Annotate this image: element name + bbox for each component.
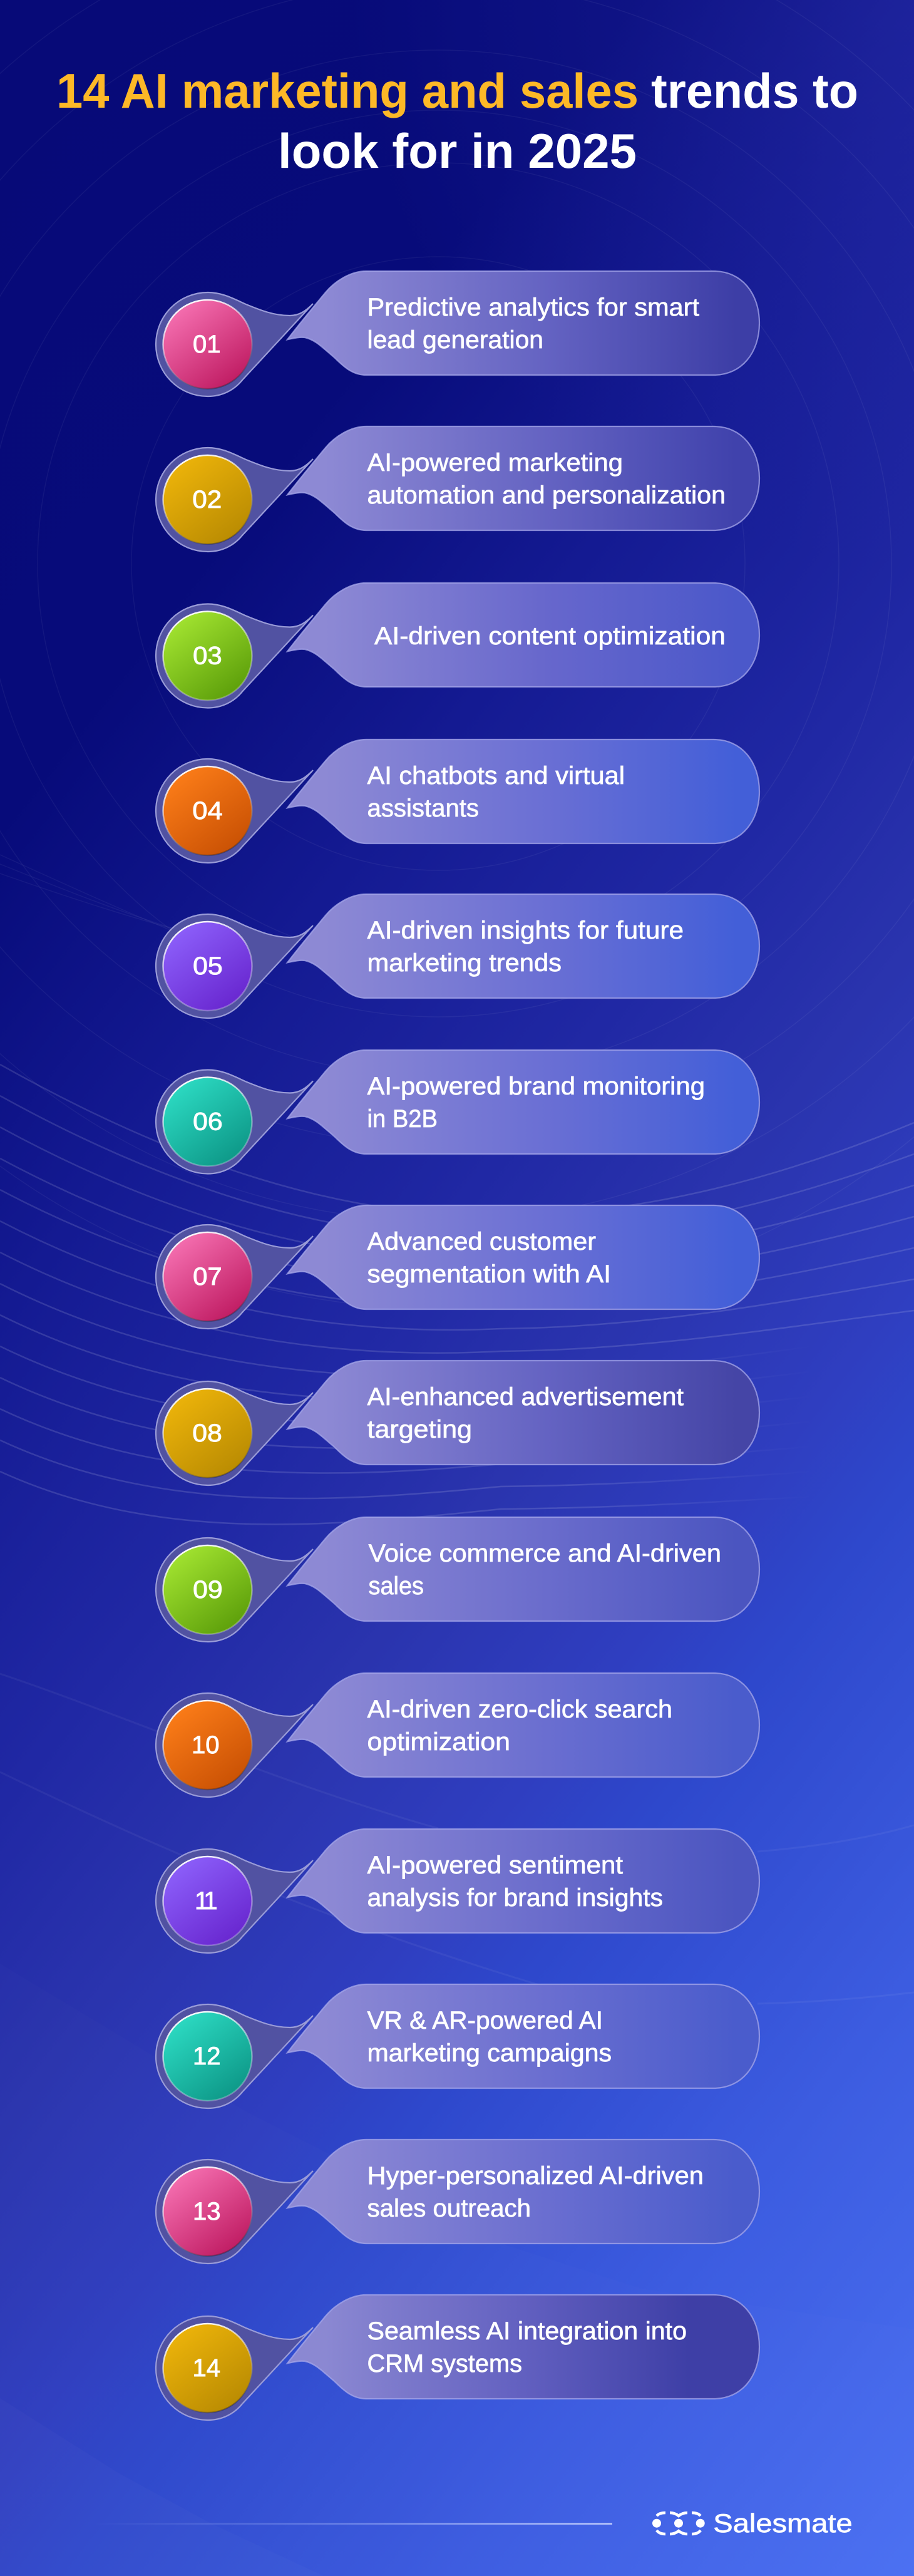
badge 13: 13 <box>193 2198 220 2225</box>
bubble 11 <box>287 1829 759 1933</box>
bubble 09: Voice commerce and AI-driven <box>368 1540 721 1567</box>
badge 05: 05 <box>193 952 223 980</box>
item 05 <box>156 894 759 1018</box>
item 02 <box>156 426 759 552</box>
item 11 <box>156 1829 759 1953</box>
bubble 02: AI-powered marketing <box>367 449 623 477</box>
bubble 11: analysis for brand insights <box>367 1884 663 1912</box>
bubble 05: marketing trends <box>367 949 562 977</box>
bubble 12 <box>287 1984 759 2088</box>
bubble 02: automation and personalization <box>367 482 726 509</box>
bubble 07: Advanced customer <box>367 1228 596 1255</box>
item 06 <box>156 1050 759 1173</box>
bubble 08: AI-enhanced advertisement <box>367 1383 684 1411</box>
badge 13 <box>156 2160 313 2264</box>
badge 07 <box>156 1225 313 1329</box>
icon: Salesmate logo <box>652 2513 705 2534</box>
badge 01: 01 <box>193 331 220 358</box>
bubble 10: optimization <box>367 1728 510 1756</box>
badge 04 <box>156 759 313 863</box>
title <box>56 63 858 178</box>
title: 14 AI marketing and sales <box>56 63 639 118</box>
badge 08: 08 <box>192 1419 222 1447</box>
item 12 <box>156 1984 759 2108</box>
badge 05 <box>156 914 313 1018</box>
bubble 03 <box>287 583 759 687</box>
item 09 <box>156 1517 759 1642</box>
bubble 13: Hyper-personalized AI-driven <box>367 2162 704 2190</box>
badge 12 <box>156 2004 313 2108</box>
footer line <box>94 2523 612 2525</box>
item 14 <box>156 2295 759 2420</box>
bubble 07 <box>287 1205 759 1309</box>
bubble 08: targeting <box>367 1416 472 1443</box>
item 08 <box>156 1361 759 1485</box>
bubble 10: AI-driven zero-click search <box>367 1696 672 1723</box>
bubble 07: segmentation with AI <box>367 1260 611 1288</box>
badge 03 <box>156 604 313 708</box>
badge 11: 11 <box>195 1887 217 1915</box>
bubble 14: CRM systems <box>367 2350 522 2378</box>
item 07 <box>156 1205 759 1329</box>
badge 11 <box>156 1849 313 1953</box>
badge 14: 14 <box>193 2354 220 2382</box>
badge 07: 07 <box>193 1263 222 1291</box>
bubble 04: assistants <box>367 795 479 822</box>
badge 01 <box>156 292 313 396</box>
item 10 <box>156 1673 759 1797</box>
bubble 11: AI-powered sentiment <box>367 1852 623 1879</box>
bubble 08 <box>287 1361 759 1465</box>
bubble 06: in B2B <box>367 1105 438 1133</box>
bubble 05: AI-driven insights for future <box>367 917 684 944</box>
badge 08 <box>156 1381 313 1485</box>
bubble 04: AI chatbots and virtual <box>367 762 625 790</box>
badge 10 <box>156 1693 313 1797</box>
bubble 03: AI-driven content optimization <box>374 622 726 650</box>
bubble 04 <box>287 739 759 843</box>
bubble 05 <box>287 894 759 998</box>
badge 10: 10 <box>192 1731 219 1759</box>
item 04 <box>156 739 759 863</box>
badge 06 <box>156 1069 313 1173</box>
title: look for in 2025 <box>278 123 637 178</box>
bubble 02 <box>287 426 759 530</box>
bubble 01: lead generation <box>367 326 543 354</box>
bubble 01: Predictive analytics for smart <box>367 294 699 321</box>
badge 02 <box>156 448 313 552</box>
bubble 10 <box>287 1673 759 1777</box>
bubble 09 <box>287 1517 759 1621</box>
bubble 06 <box>287 1050 759 1154</box>
item 13 <box>156 2140 759 2264</box>
badge 12: 12 <box>193 2043 220 2070</box>
bubble 14: Seamless AI integration into <box>367 2317 687 2345</box>
title: trends to <box>651 63 858 118</box>
item 01 <box>156 271 759 396</box>
brand name: Salesmate <box>713 2508 853 2538</box>
bubble 12: marketing campaigns <box>367 2039 612 2067</box>
bubble 12: VR & AR-powered AI <box>367 2007 603 2034</box>
bubble 13: sales outreach <box>367 2195 531 2222</box>
bubble 06: AI-powered brand monitoring <box>367 1073 705 1100</box>
badge 09: 09 <box>193 1576 223 1604</box>
badge 03: 03 <box>193 642 222 670</box>
bubble 09: sales <box>368 1572 424 1600</box>
bubble 01 <box>287 271 759 375</box>
badge 06: 06 <box>193 1108 223 1136</box>
bubble 13 <box>287 2140 759 2244</box>
badge 02: 02 <box>192 486 222 513</box>
badge 04: 04 <box>192 797 223 825</box>
bubble 14 <box>287 2295 759 2399</box>
badge 09 <box>156 1538 313 1642</box>
item 03 <box>156 583 759 708</box>
badge 14 <box>156 2316 313 2420</box>
